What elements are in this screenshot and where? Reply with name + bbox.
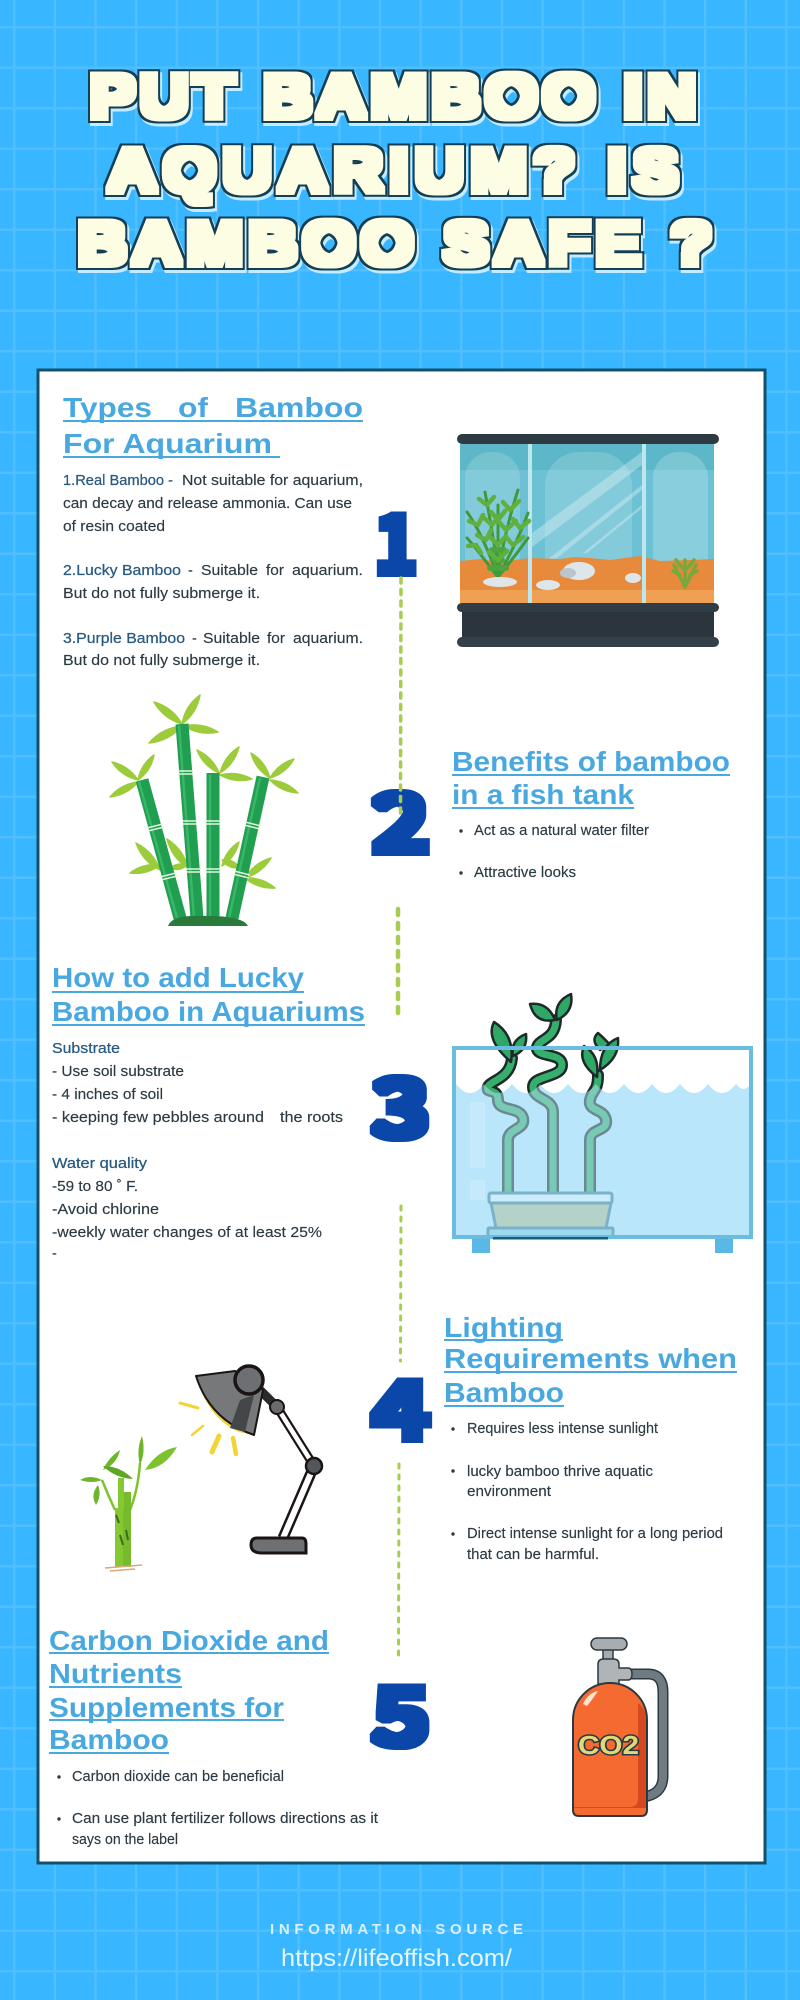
- heading: lighting: Bamboo: [444, 1377, 564, 1408]
- heading: how to add: Bamboo in Aquariums: [52, 996, 365, 1027]
- section 1 text: types of bamboo: Not suitable for aquarium,: [182, 473, 363, 489]
- lamp shade: [202, 1393, 254, 1435]
- panel: main white card: [38, 370, 765, 1863]
- lucky bamboo leaves: [492, 994, 618, 1077]
- title: BAMBOO SAFE ?: [78, 210, 712, 277]
- heading: lighting: Requirements when: [444, 1343, 737, 1374]
- bamboo leaves: [110, 695, 298, 888]
- footer: information source: [270, 1921, 523, 1972]
- heading: types of bamboo: Bamboo: [235, 392, 363, 423]
- section 3 text: how to add lucky bamboo: -: [52, 1246, 57, 1262]
- section 4 text: lighting: [444, 1312, 737, 1563]
- aquatic plant left: [467, 490, 529, 577]
- heading: benefits: [452, 746, 730, 810]
- section 1 text: types of bamboo: aquarium.: [292, 563, 363, 579]
- section 1 text: types of bamboo: -: [192, 631, 197, 647]
- connector: dotted line 2 to 3: [396, 909, 400, 1016]
- section 2 text: benefits: Attractive looks: [474, 865, 576, 881]
- heading: carbon dioxide: [49, 1625, 329, 1755]
- heading: carbon dioxide: Carbon Dioxide and: [49, 1625, 329, 1656]
- section 4 text: lighting: that can be harmful.: [467, 1547, 599, 1563]
- number 5: 5: [371, 1653, 431, 1769]
- stones: [483, 562, 641, 590]
- CO2 label: CO2: [578, 1730, 639, 1760]
- section 1 text: types of bamboo: Suitable: [201, 563, 258, 579]
- lucky bamboo stems: [488, 1020, 606, 1193]
- section 3 text: how to add lucky bamboo: - 4 inches of soil: [52, 1087, 163, 1103]
- section 3 text: how to add lucky bamboo: -59 to 80 ˚ F.: [52, 1179, 138, 1195]
- valve: [591, 1638, 632, 1684]
- section 5 text: carbon dioxide: Can use plant fertilizer follows directions as it: [72, 1811, 378, 1827]
- bamboo nodes: [147, 771, 261, 880]
- footer: information source: INFORMATION SOURCE: [270, 1921, 523, 1938]
- icon: bamboo cluster: [110, 695, 298, 926]
- section 3 text: how to add lucky bamboo: [52, 962, 365, 1262]
- section 1 text: types of bamboo: But do not fully submerge it.: [63, 653, 260, 669]
- heading: how to add: How to add Lucky: [52, 962, 304, 993]
- section 2 text: benefits: Act as a natural water filter: [474, 823, 649, 839]
- connector: dotted line 3 to 4: [399, 1206, 402, 1361]
- section 4 text: lighting: lucky bamboo thrive aquatic: [467, 1464, 653, 1480]
- light rays: [180, 1403, 236, 1454]
- section 3 text: how to add lucky bamboo: Water quality: [52, 1156, 148, 1172]
- number 3: 3: [371, 1045, 431, 1161]
- hose: [630, 1674, 663, 1796]
- section 3 text: how to add lucky bamboo: - keeping few pebbles around: [52, 1110, 264, 1126]
- bamboo stems: [142, 724, 263, 918]
- section 3 text: how to add lucky bamboo: Substrate: [52, 1041, 120, 1057]
- heading: types of bamboo: [63, 392, 363, 459]
- heading: benefits: Benefits of bamboo: [452, 746, 730, 777]
- number 2: 2: [371, 760, 431, 876]
- heading: lighting: [444, 1312, 737, 1408]
- heading: types of bamboo: of: [178, 392, 209, 423]
- icon: desk lamp: [180, 1366, 322, 1553]
- section 3 text: how to add lucky bamboo: the roots: [280, 1110, 343, 1126]
- heading: types of bamboo: Types: [63, 392, 152, 423]
- lamp base: [251, 1538, 306, 1553]
- section 3 text: how to add lucky bamboo: -Avoid chlorine: [52, 1202, 159, 1218]
- title: PUT BAMBOO IN: [90, 63, 696, 130]
- section 1 text: types of bamboo: for: [267, 631, 285, 647]
- section 3 text: how to add lucky bamboo: -weekly water changes of at least 25%: [52, 1225, 322, 1241]
- section 1 text: types of bamboo: of resin coated: [63, 519, 165, 535]
- heading: carbon dioxide: Bamboo: [49, 1724, 169, 1755]
- heading: how to add: [52, 962, 365, 1027]
- icon: CO2 cylinder: [573, 1638, 663, 1816]
- icon: fish tank: [457, 434, 719, 647]
- heading: lighting: Lighting: [444, 1312, 563, 1343]
- heading: benefits: in a fish tank: [452, 779, 634, 810]
- title: [78, 63, 712, 277]
- lamp arms: [255, 1385, 314, 1538]
- number 1: 1: [375, 481, 417, 597]
- section 1 text: types of bamboo: for: [266, 563, 284, 579]
- heading: types of bamboo: For Aquarium: [63, 428, 272, 459]
- section 4 text: lighting: Requires less intense sunlight: [467, 1421, 658, 1437]
- connector: dotted line 1 to 2: [399, 578, 403, 813]
- section 1 text: types of bamboo: [63, 392, 363, 669]
- section 4 text: lighting: Direct intense sunlight for a long period: [467, 1526, 723, 1542]
- section 5 text: carbon dioxide: [49, 1625, 378, 1848]
- section 3 text: how to add lucky bamboo: - Use soil substrate: [52, 1064, 184, 1080]
- section 1 text: types of bamboo: 3.Purple Bamboo: [63, 631, 185, 647]
- section 1 text: types of bamboo: But do not fully submerge it.: [63, 586, 260, 602]
- plant branches and leaves: [80, 1436, 177, 1510]
- section 5 text: carbon dioxide: says on the label: [72, 1832, 178, 1848]
- title: AQUARIUM? IS: [108, 137, 678, 204]
- icon: small bamboo plant: [80, 1436, 177, 1571]
- section 4 text: lighting: environment: [467, 1484, 551, 1500]
- number 4: 4: [371, 1347, 431, 1463]
- section 1 text: types of bamboo: can decay and release ammonia. Can use: [63, 496, 352, 512]
- section 1 text: types of bamboo: -: [188, 563, 193, 579]
- connector: dotted line 4 to 5: [397, 1464, 400, 1657]
- section 5 text: carbon dioxide: Carbon dioxide can be beneficial: [72, 1769, 284, 1785]
- section 1 text: types of bamboo: aquarium.: [293, 631, 363, 647]
- icon: lucky bamboo in tank: [454, 994, 751, 1253]
- section 1 text: types of bamboo: Suitable: [203, 631, 260, 647]
- aquatic plant right: [673, 560, 697, 587]
- heading: carbon dioxide: Nutrients: [49, 1658, 182, 1689]
- footer: information source: https://lifeoffish.com/: [281, 1945, 512, 1972]
- bamboo stem highlights: [139, 726, 260, 918]
- pot: [488, 1193, 613, 1237]
- heading: carbon dioxide: Supplements for: [49, 1692, 284, 1723]
- section 2 text: benefits: [452, 746, 730, 881]
- section 1 text: types of bamboo: 2.Lucky Bamboo: [63, 563, 181, 579]
- section 1 text: types of bamboo: 1.Real Bamboo -: [63, 473, 173, 489]
